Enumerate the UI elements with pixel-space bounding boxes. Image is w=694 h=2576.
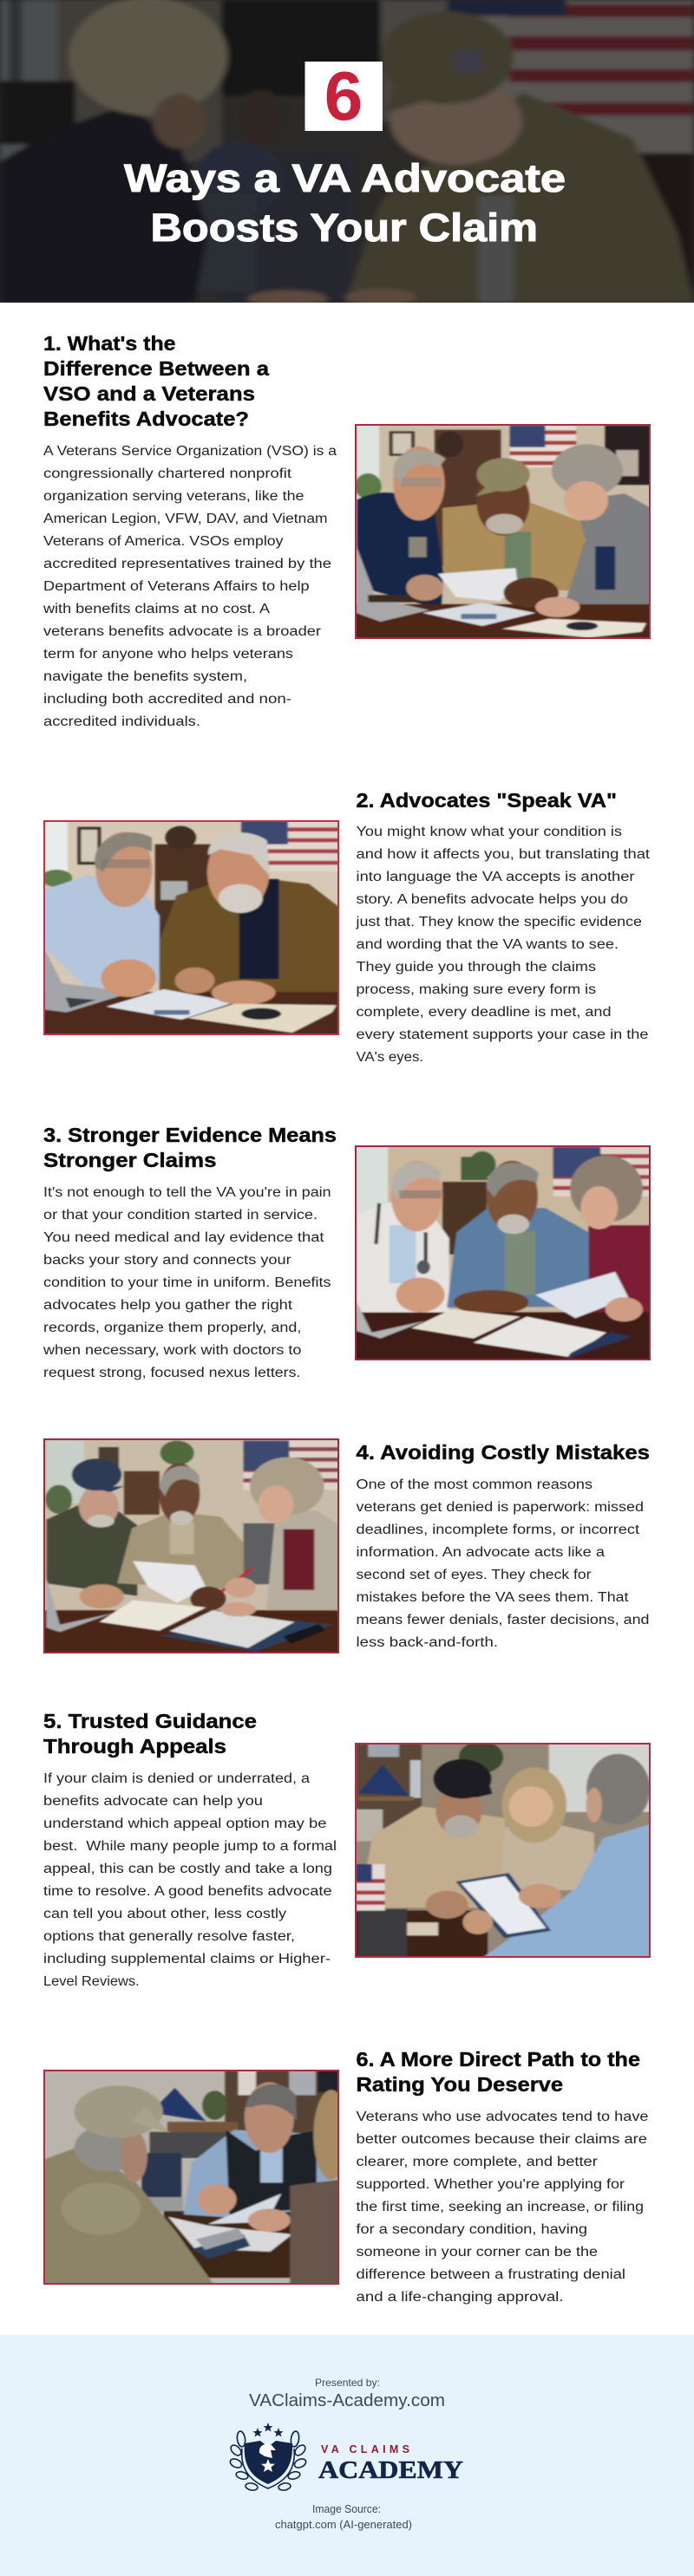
- panel: section 4: [43, 1438, 650, 1653]
- image source credit: Image Source:: [312, 2502, 381, 2515]
- body text 6: clearer, more complete, and better: [356, 2155, 598, 2169]
- panel: section 3: [43, 1124, 651, 1380]
- body text 5: appeal, this can be costly and take a long: [43, 1862, 332, 1876]
- body text 4: less back-and-forth.: [356, 1635, 498, 1650]
- body text 2: You might know what your condition is: [356, 825, 622, 839]
- heading 6: [356, 2048, 640, 2096]
- body text 1: veterans benefits advocate is a broader: [43, 624, 321, 639]
- logo text: VA CLAIMS: [321, 2443, 409, 2455]
- body text 6: someone in your corner can be the: [356, 2245, 598, 2260]
- body text 4: mistakes before the VA sees them. That: [356, 1590, 629, 1605]
- body text 3: when necessary, work with doctors to: [43, 1343, 301, 1358]
- heading 4: 4. Avoiding Costly Mistakes: [356, 1441, 650, 1464]
- heading 5: Through Appeals: [43, 1735, 226, 1758]
- panel: section 1: [43, 332, 651, 729]
- body text 4: One of the most common reasons: [356, 1477, 593, 1492]
- title: [124, 156, 566, 250]
- photo 5: couple with advisor and clipboard: [355, 1741, 651, 1958]
- body text 4: second set of eyes. They check for: [356, 1568, 592, 1582]
- heading 3: [43, 1124, 337, 1171]
- body text 5: benefits advocate can help you: [43, 1794, 263, 1809]
- heading 1: VSO and a Veterans: [43, 382, 255, 405]
- body text 2: and how it affects you, but translating that: [356, 847, 651, 862]
- photo 1: three people reviewing paperwork: [355, 424, 651, 639]
- body text 6: better outcomes because their claims are: [356, 2132, 647, 2147]
- body text 4: means fewer denials, faster decisions, and: [356, 1613, 649, 1627]
- body text 1: Veterans of America. VSOs employ: [43, 534, 284, 549]
- body text 2: VA's eyes.: [356, 1050, 423, 1065]
- body text 1: organization serving veterans, like the: [43, 489, 304, 504]
- body text 3: or that your condition started in service.: [43, 1208, 318, 1223]
- body text 3: backs your story and connects your: [43, 1253, 291, 1268]
- body text 6: the first time, seeking an increase, or filing: [356, 2200, 644, 2214]
- body text 3: advocates help you gather the right: [43, 1298, 293, 1313]
- body text 6: [356, 2110, 649, 2305]
- body text 6: difference between a frustrating denial: [356, 2267, 625, 2282]
- body text 2: complete, every deadline is met, and: [356, 1005, 611, 1020]
- body text 4: deadlines, incomplete forms, or incorrect: [356, 1523, 640, 1537]
- body text 3: [43, 1185, 331, 1380]
- body text 6: and a life-changing approval.: [356, 2290, 564, 2305]
- heading 1: [43, 332, 269, 430]
- logo: VA Claims Academy: [229, 2423, 463, 2491]
- body text 1: [43, 444, 337, 729]
- heading 5: 5. Trusted Guidance: [43, 1710, 257, 1732]
- body text 2: story. A benefits advocate helps you do: [356, 892, 628, 907]
- body text 3: You need medical and lay evidence that: [43, 1230, 324, 1245]
- body text 5: best. While many people jump to a formal: [43, 1839, 337, 1854]
- body text 2: just that. They know the specific evidence: [355, 915, 642, 929]
- body text 5: can tell you about other, less costly: [43, 1907, 286, 1921]
- body text 3: It's not enough to tell the VA you're in pain: [43, 1185, 331, 1200]
- body text 2: process, making sure every form is: [356, 982, 596, 997]
- heading 1: Difference Between a: [43, 357, 269, 380]
- heading 1: 1. What's the: [43, 332, 175, 355]
- body text 4: veterans get denied is paperwork: missed: [356, 1500, 644, 1515]
- body text 5: options that generally resolve faster,: [43, 1929, 295, 1944]
- hero background photo: [0, 0, 694, 303]
- body text 1: navigate the benefits system,: [43, 669, 247, 684]
- logo: VA Claims Academy: ACADEMY: [318, 2456, 463, 2484]
- body text 1: American Legion, VFW, DAV, and Vietnam: [43, 512, 328, 526]
- photo 6: veteran in camo meeting advocate: [43, 2070, 349, 2285]
- body text 4: information. An advocate acts like a: [356, 1545, 605, 1560]
- heading 5: [43, 1710, 257, 1758]
- photo 2: advocate and veteran at table: [41, 820, 339, 1035]
- body text 3: condition to your time in uniform. Benefits: [43, 1275, 331, 1290]
- presented by text: Presented by:: [315, 2377, 380, 2389]
- heading 1: Benefits Advocate?: [43, 408, 249, 430]
- image source credit: chatgpt.com (AI-generated): [275, 2518, 412, 2531]
- heading 3: 3. Stronger Evidence Means: [43, 1124, 337, 1146]
- heading 3: Stronger Claims: [43, 1149, 217, 1171]
- panel: section 2: [41, 789, 651, 1065]
- body text 5: time to resolve. A good benefits advocate: [43, 1884, 332, 1899]
- title: Boosts Your Claim: [151, 205, 538, 250]
- body text 1: accredited individuals.: [43, 714, 200, 729]
- body text 5: If your claim is denied or underrated, a: [43, 1771, 310, 1786]
- body text 2: and wording that the VA wants to see.: [356, 937, 619, 952]
- body text 1: Department of Veterans Affairs to help: [43, 579, 310, 594]
- panel: section 5: [43, 1710, 651, 1989]
- body text 1: with benefits claims at no cost. A: [43, 602, 271, 616]
- body text 1: term for anyone who helps veterans: [43, 647, 293, 662]
- heading 6: 6. A More Direct Path to the: [356, 2048, 640, 2071]
- body text 2: [355, 825, 651, 1065]
- body text 5: understand which appeal option may be: [43, 1816, 326, 1831]
- body text 6: Veterans who use advocates tend to have: [356, 2110, 649, 2124]
- body text 5: Level Reviews.: [43, 1974, 140, 1989]
- panel: section 6: [43, 2048, 649, 2305]
- number box: [305, 57, 383, 134]
- number box: 6: [324, 57, 363, 134]
- body text 6: supported. Whether you're applying for: [356, 2177, 625, 2192]
- title: Ways a VA Advocate: [124, 156, 566, 200]
- hero header: [0, 0, 694, 308]
- body text 5: [43, 1771, 337, 1989]
- body text 2: into language the VA accepts is another: [356, 870, 635, 884]
- body text 4: [356, 1477, 649, 1650]
- body text 3: records, organize them properly, and,: [43, 1321, 301, 1335]
- heading 2: 2. Advocates "Speak VA": [356, 789, 617, 812]
- body text 6: for a secondary condition, having: [356, 2222, 587, 2237]
- photo 3: doctor, veteran and woman: [355, 1145, 651, 1360]
- heading 6: Rating You Deserve: [356, 2073, 563, 2096]
- body text 5: including supplemental claims or Higher-: [43, 1952, 331, 1966]
- body text 3: request strong, focused nexus letters.: [43, 1366, 300, 1380]
- body text 1: including both accredited and non-: [43, 692, 291, 707]
- body text 2: They guide you through the claims: [356, 960, 596, 975]
- body text 2: every statement supports your case in the: [356, 1027, 649, 1042]
- image source credit: [275, 2502, 412, 2531]
- photo 4: veterans and advisor checking forms: [43, 1438, 339, 1653]
- footer panel: [0, 2335, 694, 2576]
- website: VAClaims-Academy.com: [249, 2391, 445, 2410]
- body text 1: A Veterans Service Organization (VSO) is a: [43, 444, 337, 459]
- body text 1: accredited representatives trained by the: [43, 557, 331, 571]
- icon: eagle shield and wreath: [229, 2423, 307, 2491]
- body text 1: congressionally chartered nonprofit: [43, 466, 292, 481]
